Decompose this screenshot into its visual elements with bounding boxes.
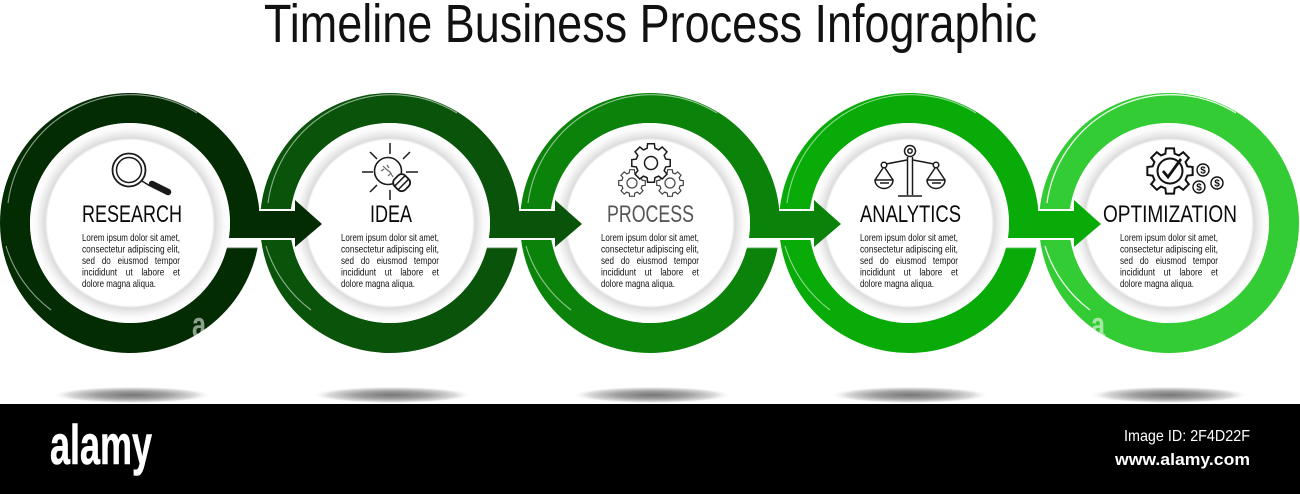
ring 4 analytics	[785, 95, 1038, 338]
arrow 3	[749, 200, 841, 247]
text research: Lorem ipsum dolor sit amet,	[82, 232, 180, 244]
text process: Lorem ipsum dolor sit amet,	[601, 232, 699, 244]
watermark letter right: a	[1091, 304, 1106, 345]
label idea: IDEA	[370, 201, 412, 228]
text analytics	[860, 232, 958, 290]
label research: RESEARCH	[82, 201, 182, 228]
footer bar	[0, 404, 1300, 494]
ring 2 idea	[266, 95, 519, 338]
text research: consectetur adipiscing elit,	[82, 244, 180, 256]
text optimization: Lorem ipsum dolor sit amet,	[1120, 232, 1218, 244]
text idea: consectetur adipiscing elit,	[341, 244, 439, 256]
arrow 4	[1009, 200, 1101, 247]
arrow 1	[230, 200, 322, 247]
text analytics: dolore magna aliqua.	[860, 278, 934, 290]
label optimization: OPTIMIZATION	[1103, 201, 1237, 228]
ring 3 process	[526, 95, 779, 338]
shadow 1	[52, 386, 212, 404]
watermark letter left: a	[192, 304, 207, 345]
text idea: Lorem ipsum dolor sit amet,	[341, 232, 439, 244]
text process: consectetur adipiscing elit,	[601, 244, 699, 256]
image id: Image ID: 2F4D22F	[1124, 428, 1250, 445]
icon: light bulb	[362, 143, 418, 200]
text process: sed do eiusmod tempor	[601, 255, 699, 267]
text process: incididunt ut labore et	[601, 266, 699, 278]
icon: gear with check and coins: $	[1214, 178, 1220, 190]
text idea: incididunt ut labore et	[341, 266, 439, 278]
arrow 2	[490, 200, 582, 247]
shadow 3	[572, 386, 732, 404]
ring 5 optimization	[1045, 95, 1284, 338]
text idea	[341, 232, 439, 290]
icon: gear with check and coins: $	[1200, 166, 1206, 176]
text optimization: consectetur adipiscing elit,	[1120, 244, 1218, 256]
ring 1 research	[6, 95, 259, 338]
text process	[601, 232, 699, 290]
label process: PROCESS	[607, 201, 694, 228]
website: www.alamy.com	[1114, 450, 1250, 469]
text research: dolore magna aliqua.	[82, 278, 156, 290]
text research: incididunt ut labore et	[82, 266, 180, 278]
shadow 2	[312, 386, 472, 404]
shadow 4	[830, 386, 990, 404]
text research: sed do eiusmod tempor	[82, 255, 180, 267]
text analytics: Lorem ipsum dolor sit amet,	[860, 232, 958, 244]
icon: gears	[619, 144, 683, 196]
text analytics: sed do eiusmod tempor	[860, 255, 958, 267]
text optimization: incididunt ut labore et	[1120, 266, 1218, 278]
icon: gear with check and coins	[1147, 148, 1223, 194]
label analytics: ANALYTICS	[860, 201, 961, 228]
shadow 5	[1089, 386, 1249, 404]
text process: dolore magna aliqua.	[601, 278, 675, 290]
alamy logo: alamy	[50, 413, 152, 476]
text analytics: incididunt ut labore et	[860, 266, 958, 278]
text idea: dolore magna aliqua.	[341, 278, 415, 290]
icon: magnifier	[112, 154, 168, 192]
text research	[82, 232, 180, 290]
text analytics: consectetur adipiscing elit,	[860, 244, 958, 256]
icon: balance scale	[875, 146, 945, 196]
text optimization	[1120, 232, 1218, 290]
icon: gear with check and coins: $	[1196, 182, 1202, 194]
text optimization: sed do eiusmod tempor	[1120, 255, 1218, 267]
text idea: sed do eiusmod tempor	[341, 255, 439, 267]
text optimization: dolore magna aliqua.	[1120, 278, 1194, 290]
